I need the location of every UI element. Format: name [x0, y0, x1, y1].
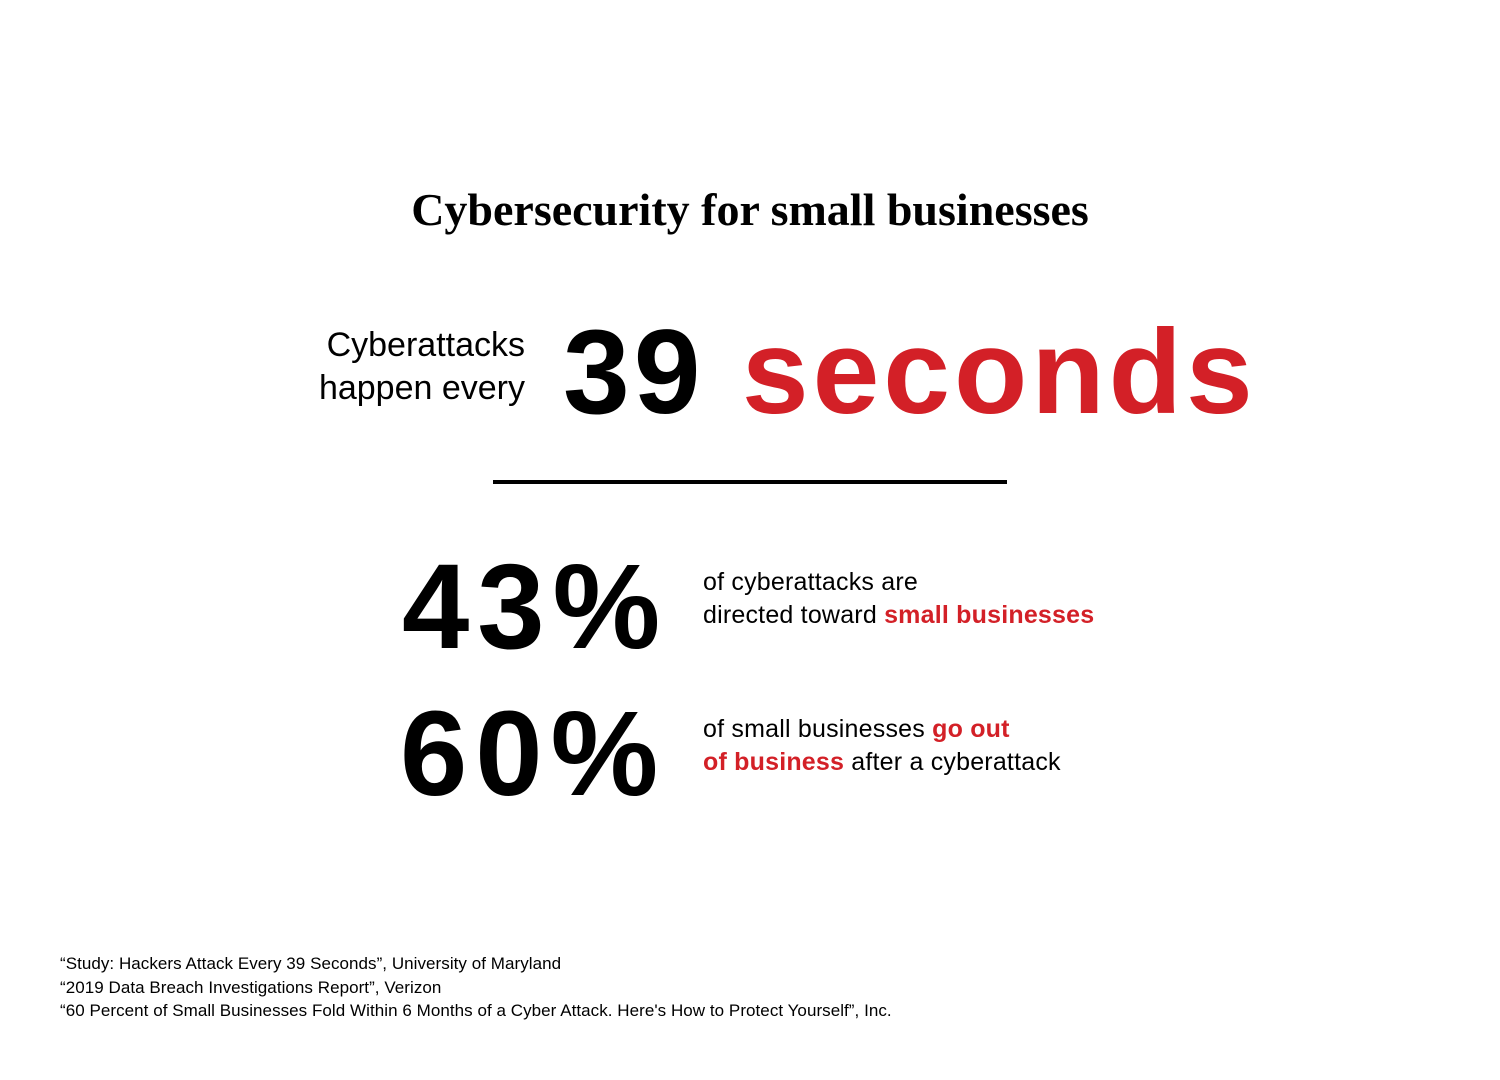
text: 60% description: of small businesses go out — [703, 715, 1010, 743]
text: 43% description: directed toward small businesses — [703, 601, 1094, 629]
label: cyberattacks happen every — [319, 326, 525, 407]
title: Cybersecurity for small businesses — [411, 184, 1089, 235]
sources — [60, 954, 892, 1020]
divider line — [493, 480, 1007, 484]
text: 43% description — [703, 568, 1094, 629]
label: cyberattacks happen every: Cyberattacks — [327, 326, 525, 364]
sources: “60 Percent of Small Businesses Fold Within 6 Months of a Cyber Attack. Here's How to Protect Yourself”, Inc. — [60, 1001, 892, 1020]
text: 60% description — [703, 715, 1061, 776]
label: cyberattacks happen every: happen every — [319, 369, 525, 407]
stat: 43%: 43% — [402, 538, 668, 674]
big stat: 39 seconds: 39 seconds — [563, 305, 1257, 439]
sources: “2019 Data Breach Investigations Report”, Verizon — [60, 978, 441, 996]
text: 60% description: of business after a cyberattack — [703, 748, 1061, 776]
text: 43% description: of cyberattacks are — [703, 568, 918, 596]
stat: 60%: 60% — [400, 685, 666, 821]
sources: “Study: Hackers Attack Every 39 Seconds”, University of Maryland — [60, 954, 561, 973]
